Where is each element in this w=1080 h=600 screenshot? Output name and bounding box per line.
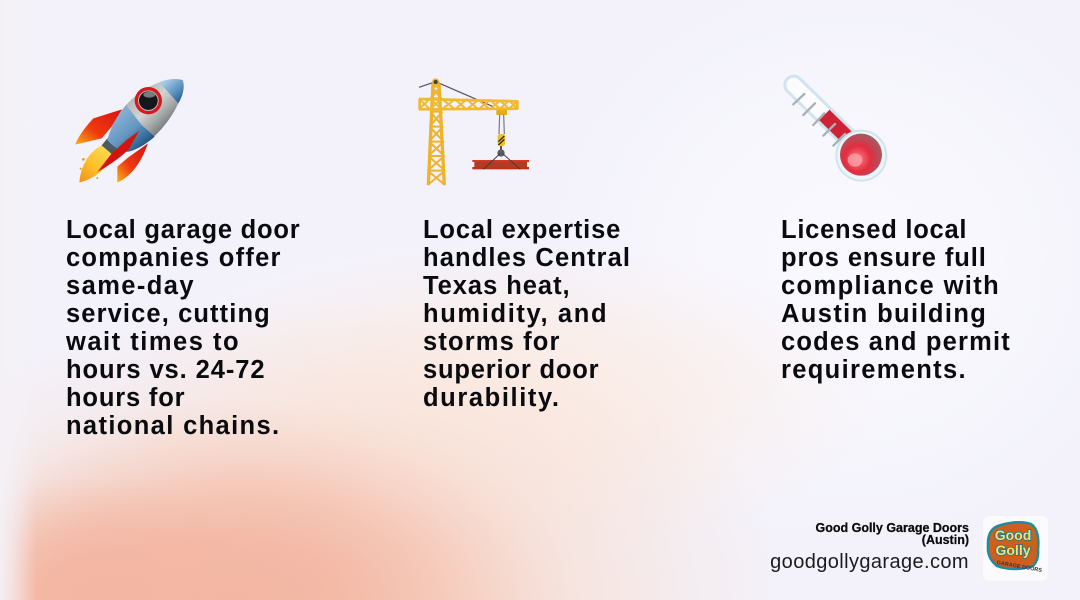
logo: Good [995,527,1031,543]
left fin [75,109,122,145]
logo [983,516,1048,581]
mast [428,83,445,185]
mercury [824,115,853,143]
text block: same-day service: hours vs. 24-72 [66,356,265,384]
nozzle [102,138,118,154]
text block: licensed pros: requirements. [781,356,967,384]
center fin [97,131,139,172]
scale ticks [793,94,845,146]
nose [159,79,184,103]
text block: local expertise: Texas heat, [423,272,571,300]
text block: licensed pros [781,216,1011,384]
hook [498,146,504,150]
text block: same-day service: service, cutting [66,300,271,328]
jib [419,99,518,110]
footer company name: (Austin) [922,533,969,547]
lower fin [117,143,148,183]
text block: same-day service: national chains. [66,412,280,440]
text block: local expertise: durability. [423,384,561,412]
text block: same-day service [66,216,300,440]
text block: local expertise: superior door [423,356,599,384]
text block: local expertise: handles Central [423,244,631,272]
text block: licensed pros: Licensed local [781,216,967,244]
trolley [496,110,507,115]
glass tube [794,85,850,140]
footer website: goodgollygarage.com [770,551,969,573]
text block: same-day service: Local garage door [66,216,300,244]
text block: same-day service: wait times to [66,328,240,356]
text block: same-day service: hours for [66,384,185,412]
text block: local expertise: storms for [423,328,561,356]
window [135,87,162,114]
slings [483,153,520,169]
text block: licensed pros: pros ensure full [781,244,987,272]
body [107,79,184,152]
flame [79,144,123,183]
text block: licensed pros: Austin building [781,300,987,328]
footer company name [816,521,969,547]
text block: local expertise: Local expertise [423,216,621,244]
text block: same-day service: same-day [66,272,195,300]
block [498,134,505,146]
text block: licensed pros: compliance with [781,272,1000,300]
text block: local expertise [423,216,631,412]
logo: Golly [995,542,1031,558]
tail [107,105,155,152]
beam [472,160,529,162]
logo: GARAGE DOORS [996,560,1043,574]
hook lines [499,115,504,134]
pivot [432,78,439,86]
text block: licensed pros: codes and permit [781,328,1011,356]
text block: local expertise: humidity, and [423,300,608,328]
bulb glass [835,130,887,182]
cables [419,82,493,107]
footer company name: Good Golly Garage Doors [816,521,969,535]
text block: same-day service: companies offer [66,244,282,272]
